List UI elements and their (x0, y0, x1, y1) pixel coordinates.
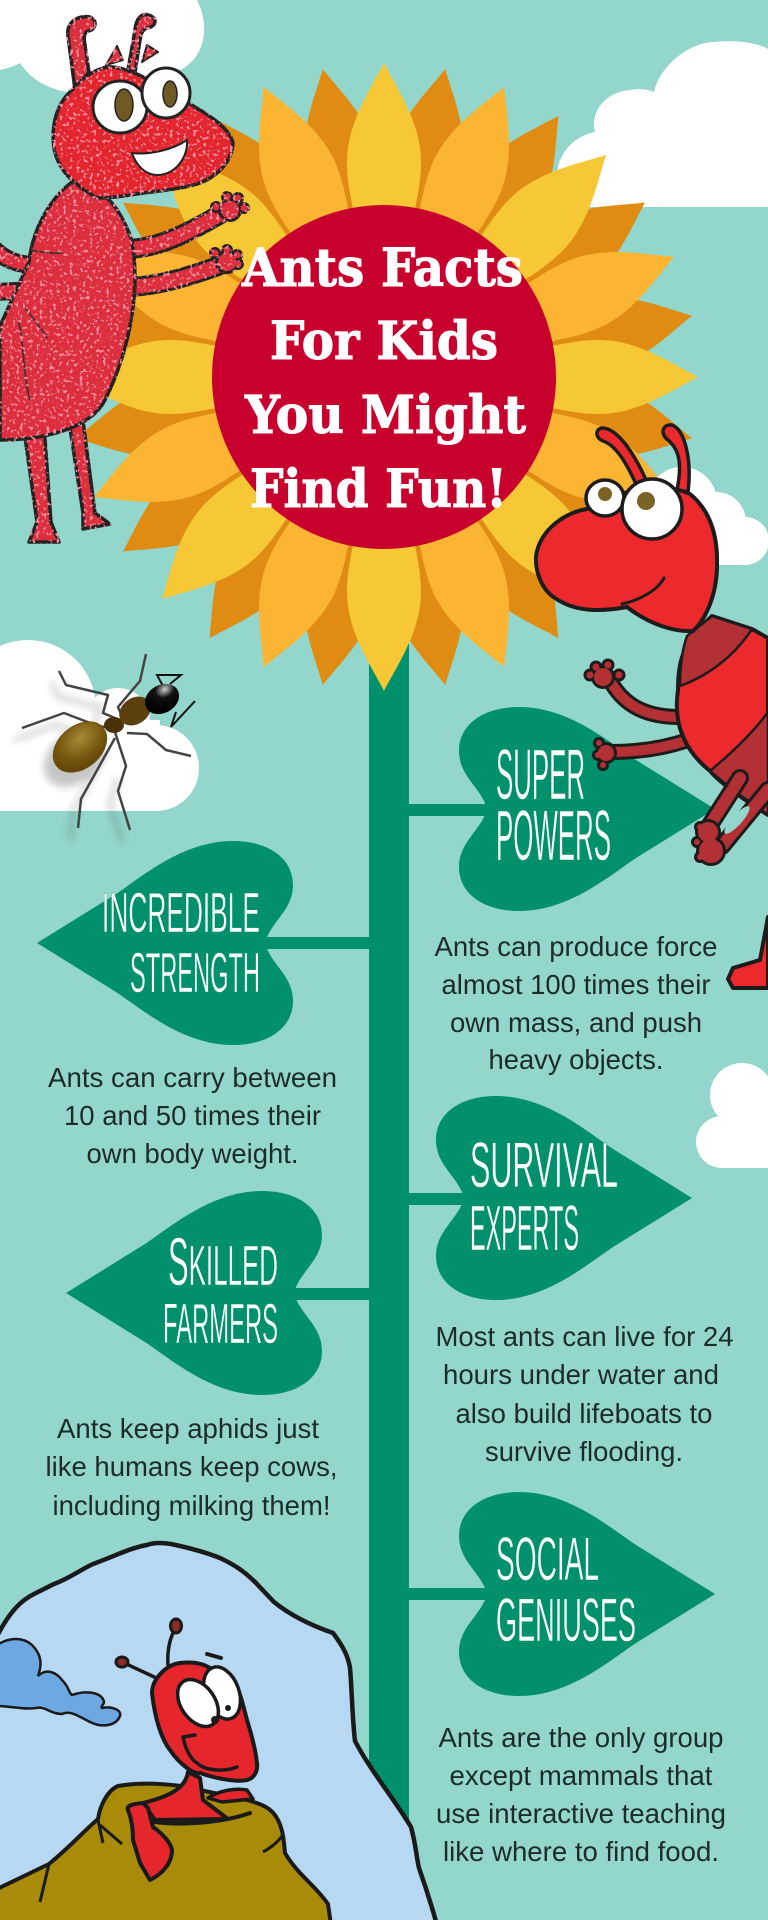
text: incredible strength: 10 and 50 times their (64, 1100, 321, 1131)
pupils (598, 487, 655, 510)
leaf title (163, 1224, 278, 1356)
title: You Might (244, 385, 526, 446)
smile (183, 1735, 237, 1770)
body (0, 182, 135, 440)
pupils (211, 1705, 231, 1724)
text: skilled farmers: including milking them! (52, 1490, 330, 1521)
mound creases (40, 1820, 282, 1902)
leaf title (496, 736, 611, 876)
rear hand fills (694, 822, 723, 863)
text: social geniuses: Ants are the only group (438, 1722, 724, 1753)
text: survival experts: survive flooding. (485, 1436, 683, 1467)
antennae (122, 1629, 175, 1682)
lower legs (24, 405, 110, 542)
branch: survival experts (405, 1193, 467, 1205)
lower leg and foot (728, 917, 768, 988)
leaf title (102, 881, 260, 1005)
textured limbs and body (0, 15, 250, 542)
hand fills (586, 662, 622, 768)
leaf: survival experts (436, 1096, 692, 1300)
back legs (0, 250, 38, 292)
cloud: behind right ant (647, 467, 768, 565)
text: super powers: almost 100 times their (442, 969, 710, 1000)
branch: social geniuses (405, 1588, 490, 1600)
leaf: skilled farmers: FARMERS (163, 1292, 278, 1356)
leaf: social geniuses (459, 1492, 715, 1696)
text: incredible strength (48, 1062, 337, 1169)
title: For Kids (270, 311, 498, 372)
belly line (155, 1813, 250, 1824)
right arm (208, 1789, 253, 1802)
stem (369, 640, 409, 1840)
ant head (139, 678, 185, 720)
text: incredible strength: own body weight. (86, 1138, 298, 1169)
leaf: survival experts: EXPERTS (470, 1192, 579, 1264)
knobs (116, 1619, 182, 1667)
body creases (18, 250, 62, 400)
title: Find Fun! (250, 459, 507, 520)
cloud: top right (558, 41, 768, 207)
ant shadow (14, 683, 122, 842)
antennae (68, 15, 155, 90)
text: social geniuses: use interactive teaching (436, 1798, 726, 1829)
leaf: super powers: SUPER (496, 736, 585, 815)
eyes (169, 1662, 247, 1734)
hand fills (212, 194, 248, 271)
ant abdomen (44, 712, 116, 782)
icon: blue cloud (0, 1639, 120, 1725)
cloud: left middle (0, 640, 199, 811)
leaf title: SOCIAL (496, 1525, 599, 1593)
flower centre (212, 205, 556, 549)
ant waist and thorax (104, 691, 156, 733)
text: super powers: heavy objects. (488, 1044, 664, 1075)
branch: skilled farmers (292, 1288, 372, 1300)
rear gap (721, 803, 753, 837)
icon: bottom cartoon ant (116, 1619, 257, 1880)
cloud: right small (696, 1063, 768, 1168)
rear hand outlines (691, 819, 726, 866)
brow (207, 1654, 221, 1658)
icon: right cartoon ant (536, 425, 768, 988)
branch: super powers (405, 804, 490, 816)
antennae (597, 425, 689, 492)
body and neck (143, 1772, 228, 1820)
brows (106, 45, 158, 65)
leaf title (496, 1525, 636, 1654)
icon: top-left textured red ant (0, 15, 250, 542)
leaf: incredible strength: INCREDIBLE (102, 881, 260, 945)
smile (622, 578, 664, 604)
head (536, 487, 717, 631)
illustration: bottom speech bubble (0, 1543, 437, 1920)
lower abdomen (710, 712, 768, 815)
smile (132, 140, 187, 175)
body (677, 616, 768, 815)
text: super powers: Ants can produce force (434, 931, 718, 962)
text: social geniuses: except mammals that (450, 1760, 713, 1791)
yellow petals (70, 63, 698, 691)
amber petals (80, 73, 688, 681)
text: super powers: own mass, and push (450, 1007, 702, 1038)
flower (69, 62, 699, 692)
leaf: super powers (459, 707, 715, 911)
title: Ants Facts (241, 238, 523, 299)
leaf: incredible strength: STRENGTH (130, 941, 260, 1005)
text: skilled farmers: like humans keep cows, (46, 1451, 338, 1482)
cloud: top left (0, 0, 204, 95)
text: social geniuses: like where to find food. (443, 1836, 719, 1867)
text: super powers (434, 931, 718, 1075)
eyes (93, 68, 190, 133)
hand outlines (209, 191, 250, 274)
illustration: mound (0, 1784, 331, 1920)
text: social geniuses (436, 1722, 726, 1867)
text: skilled farmers (46, 1413, 338, 1521)
left arm and hand (128, 1803, 172, 1880)
rear legs (708, 778, 768, 846)
text: skilled farmers: Ants keep aphids just (57, 1413, 319, 1444)
eyes (586, 479, 682, 539)
text: survival experts (436, 1321, 734, 1467)
arms (128, 212, 224, 287)
icon: small realistic ant (14, 654, 195, 842)
arms (610, 684, 688, 752)
leaf title: SKILLED (168, 1224, 278, 1300)
leaf title (470, 1129, 618, 1264)
ant legs (22, 654, 191, 830)
text: incredible strength: Ants can carry between (48, 1062, 337, 1093)
leaf: incredible strength (37, 841, 293, 1045)
text: survival experts: also build lifeboats to (456, 1398, 712, 1429)
branch: incredible strength (262, 937, 372, 949)
text: survival experts: hours under water and (443, 1359, 719, 1390)
back petals (69, 62, 699, 692)
head (152, 1663, 257, 1781)
ant antennae (157, 675, 195, 727)
head (53, 67, 233, 198)
text: survival experts: Most ants can live for 24 (436, 1321, 734, 1352)
title (241, 238, 526, 520)
leaf: skilled farmers (66, 1191, 322, 1395)
thorax (680, 616, 752, 686)
hand outlines (584, 658, 626, 771)
